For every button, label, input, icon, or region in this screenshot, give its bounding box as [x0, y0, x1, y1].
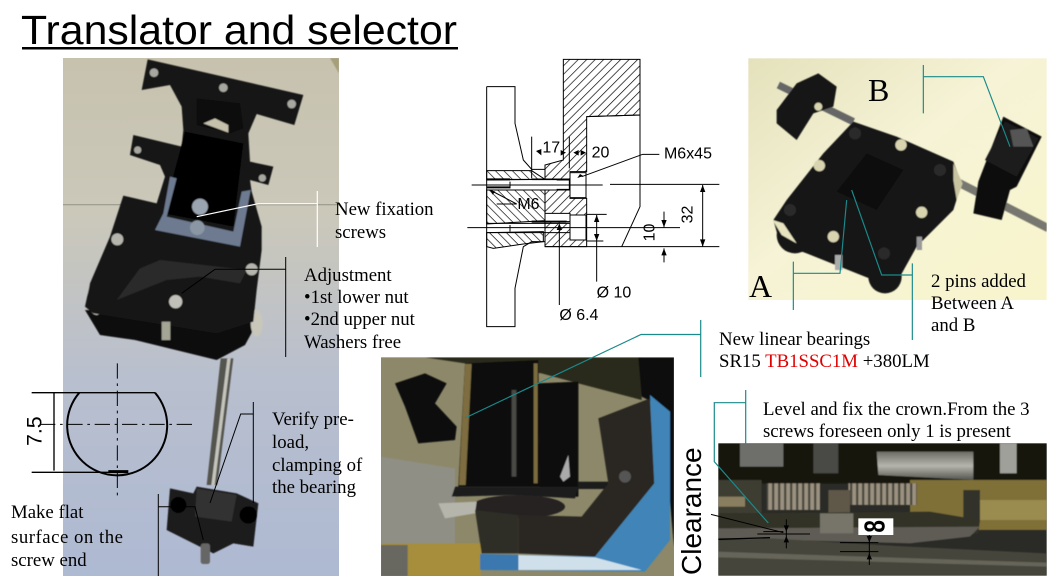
callouts: teal leader lines on carriage photo: [793, 65, 1010, 340]
callout: adjustment: Adjustment: [304, 265, 392, 286]
callout: adjustment: [182, 257, 416, 357]
callout: level and fix the crown: Level and fix the crown.From the 3: [763, 399, 1030, 420]
callout: make flat surface: [11, 494, 203, 576]
callout: adjustment: •2nd upper nut: [304, 309, 416, 330]
dimension labels: Ø 6.4: [559, 307, 599, 324]
callout: verify pre-load: the bearing: [272, 477, 357, 498]
callout: new fixation screws: screws: [335, 222, 386, 243]
dimension 8 on white label: 8: [860, 520, 891, 533]
label: B: B: [868, 72, 889, 108]
dimension marks: [711, 514, 878, 565]
callout: verify pre-load: Verify pre-: [272, 409, 354, 430]
cross-section drawing of flat screw end: [23, 363, 195, 500]
callout: adjustment: Washers free: [304, 332, 401, 353]
threaded rod: [207, 358, 233, 485]
dimension 7.5: 7.5: [23, 416, 47, 446]
photo: carriage with A and B parts: [748, 58, 1048, 300]
callout: verify pre-load: load,: [272, 432, 309, 453]
rotated label: Clearance: Clearance: [676, 447, 707, 575]
dimension labels: [517, 140, 712, 324]
dimension 8 on white label: [858, 518, 893, 535]
bearing block: [167, 487, 258, 553]
callout: new linear bearings: [465, 320, 930, 418]
callout: 2 pins added: and B: [931, 315, 975, 336]
callout: verify pre-load: [210, 402, 363, 503]
lower body: [85, 310, 255, 360]
dimension labels: 10: [642, 223, 659, 241]
callout: adjustment: •1st lower nut: [304, 287, 409, 308]
callout: new linear bearings: New linear bearings: [719, 329, 870, 350]
callout: new fixation screws: New fixation: [335, 199, 434, 220]
callout: verify pre-load: clamping of: [272, 455, 363, 476]
callout: make flat surface: surface on the: [11, 527, 123, 548]
callout: level and fix the crown: screws foreseen only 1 is present: [763, 421, 1012, 442]
callout: make flat surface: Make flat: [11, 502, 84, 523]
dimension labels: 17: [542, 140, 560, 157]
title: Translator and selector: [21, 7, 457, 53]
photo: crown detail with clearance: [711, 443, 1047, 576]
upper carriage: [85, 59, 303, 333]
dimension labels: 32: [680, 205, 697, 223]
callout: 2 pins added: Between A: [931, 293, 1014, 314]
callout: new fixation screws: [197, 191, 434, 247]
callout: new linear bearings: SR15 TB1SSC1M +380LM: [719, 351, 930, 372]
callout: 2 pins added: [931, 271, 1027, 336]
callout: make flat surface: screw end: [11, 550, 87, 571]
dimension labels: M6: [517, 196, 540, 213]
dimension labels: Ø 10: [597, 285, 631, 302]
photo: translator assembly: [63, 58, 339, 576]
callout: level and fix the crown: [714, 390, 1030, 523]
label: A: A: [749, 268, 772, 304]
dimension labels: M6x45: [664, 146, 712, 163]
photo: selector on blue stand: [381, 357, 674, 576]
callout: 2 pins added: 2 pins added: [931, 271, 1027, 292]
technical drawing: section: [467, 59, 719, 327]
dimension labels: 20: [592, 144, 610, 161]
